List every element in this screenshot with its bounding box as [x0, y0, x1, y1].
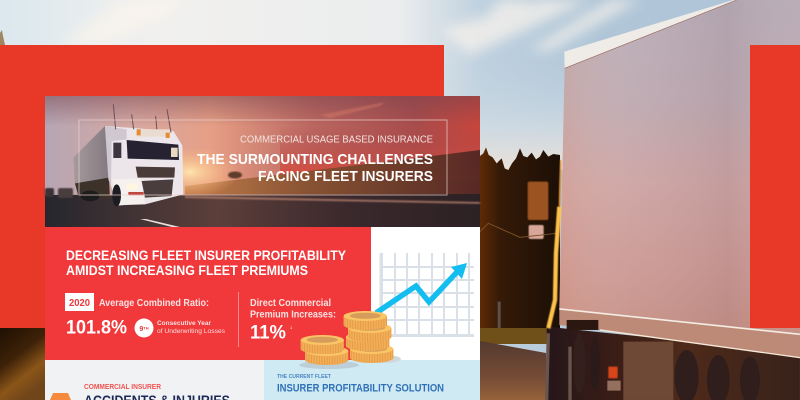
- roadside grass and road: [480, 328, 550, 400]
- consecutive year note: Consecutive Year: [157, 320, 211, 327]
- combined ratio value: 101.8%: [66, 318, 127, 338]
- red panel left: [0, 45, 444, 328]
- consecutive year note: [157, 320, 226, 335]
- icon: 9th badge: 9: [139, 326, 143, 333]
- icon: 9th badge: [134, 318, 154, 338]
- foreground grass lower left: [0, 328, 46, 400]
- consecutive year note: of Underwriting Losses: [157, 328, 226, 335]
- infographic card: [45, 96, 480, 400]
- panel: lower left accidents section: [45, 360, 264, 400]
- small tree top left: [0, 30, 5, 45]
- year badge: [65, 293, 94, 311]
- section heading: AMIDST INCREASING FLEET PREMIUMS: [66, 263, 308, 278]
- icon: stacks of gold coins: [299, 311, 401, 369]
- premium increases label: Direct Commercial: [250, 298, 331, 309]
- right stack: [344, 311, 393, 363]
- panel: chart background: [371, 227, 480, 360]
- section kicker: COMMERCIAL INSURER: [84, 382, 162, 391]
- premium increases label: [250, 298, 336, 320]
- red panel right: [750, 45, 800, 328]
- year badge: 2020: [69, 298, 90, 309]
- section kicker: THE CURRENT FLEET: [277, 374, 332, 380]
- section heading: DECREASING FLEET INSURER PROFITABILITY: [66, 248, 346, 263]
- section title: INSURER PROFITABILITY SOLUTION: [277, 382, 444, 394]
- traffic behind truck: [45, 188, 73, 198]
- header title: [197, 151, 433, 185]
- combined ratio label: Average Combined Ratio:: [99, 298, 209, 309]
- panel: lower right solution section: [264, 360, 480, 400]
- premium increases value: 11%: [250, 322, 286, 344]
- header banner photo: [45, 96, 480, 227]
- header eyebrow: COMMERCIAL USAGE BASED INSURANCE: [240, 134, 433, 146]
- header frame: [79, 120, 447, 195]
- icon: 9th badge: TH: [143, 326, 149, 330]
- truck in header: [73, 104, 183, 206]
- tree line: [480, 147, 560, 333]
- icon: orange cone: [50, 393, 71, 400]
- premium increases label: Premium Increases:: [250, 310, 336, 320]
- header title: THE SURMOUNTING CHALLENGES: [197, 151, 433, 168]
- left stack: [301, 335, 348, 365]
- arrow: rising trend: [376, 263, 467, 313]
- trailer body: [547, 0, 800, 400]
- premium increases value: 1: [290, 325, 293, 330]
- line chart grid: [380, 253, 474, 336]
- header title: FACING FLEET INSURERS: [258, 168, 433, 185]
- panel: profitability stats: [45, 227, 371, 360]
- section heading: [66, 248, 346, 278]
